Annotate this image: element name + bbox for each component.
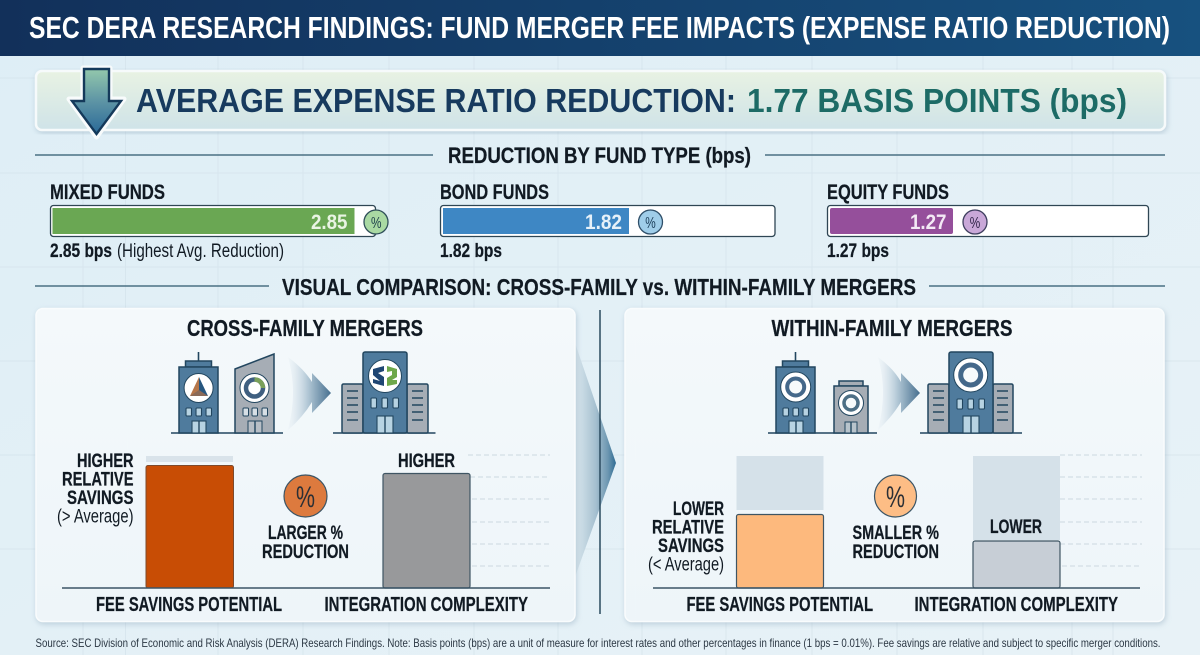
chart: integration complexity, higher — [383, 451, 550, 588]
axis labels: FEE SAVINGS POTENTIAL — [96, 593, 282, 616]
label: higher relative savings: RELATIVE — [62, 470, 134, 490]
label: higher relative savings: HIGHER — [77, 451, 134, 472]
chart: integration complexity, lower — [973, 455, 1142, 588]
chart: integration complexity, lower: LOWER — [990, 517, 1042, 538]
bar: equity funds 1.27 — [828, 206, 1148, 236]
icon: percent circle, larger: % — [296, 481, 315, 514]
bar: bond funds 1.82 — [440, 206, 775, 236]
label: smaller percent reduction: REDUCTION — [852, 542, 939, 563]
label: larger percent reduction: REDUCTION — [262, 542, 349, 563]
heading: CROSS-FAMILY MERGERS — [187, 315, 423, 341]
label: equity funds: EQUITY FUNDS — [827, 180, 949, 204]
icon: merge arrow — [288, 357, 331, 430]
panel: bond funds — [440, 180, 775, 262]
axis baseline — [653, 587, 1140, 589]
chart: fee savings potential, lower — [736, 456, 824, 588]
headline label: AVERAGE EXPENSE RATIO REDUCTION: — [136, 83, 736, 120]
icon: percent circle, larger — [284, 475, 327, 517]
label: mixed funds: MIXED FUNDS — [50, 180, 165, 204]
axis labels — [96, 593, 528, 616]
bar: mixed funds 2.85 — [50, 206, 376, 236]
icon: merge arrow — [878, 357, 920, 430]
icon: percent badge — [963, 210, 987, 234]
panel: cross-family mergers — [36, 308, 575, 622]
icon: down arrow — [69, 68, 124, 137]
label: smaller percent reduction: SMALLER % — [852, 523, 939, 544]
value note: 1.27 bps — [827, 240, 889, 262]
label: lower relative savings: RELATIVE — [652, 518, 724, 538]
panel: within-family mergers — [625, 308, 1164, 622]
label: bond funds: BOND FUNDS — [440, 180, 549, 204]
label: lower relative savings: (< Average) — [648, 554, 724, 576]
axis labels: INTEGRATION COMPLEXITY — [914, 593, 1118, 616]
axis labels: INTEGRATION COMPLEXITY — [324, 593, 528, 616]
icon: percent badge — [638, 210, 662, 234]
panel: mixed funds — [50, 180, 388, 262]
icon: merged building — [920, 352, 1022, 433]
icon: percent circle, smaller — [874, 475, 916, 517]
label: higher relative savings: SAVINGS — [67, 488, 134, 509]
label: lower relative savings — [648, 499, 724, 576]
section heading: reduction by fund type: REDUCTION BY FUND TYPE (bps) — [448, 143, 751, 168]
divider: central vertical line — [599, 310, 601, 614]
heading: WITHIN-FAMILY MERGERS — [772, 315, 1012, 341]
icon: percent badge: % — [371, 215, 382, 232]
bar: mixed funds 2.85: 2.85 — [311, 210, 348, 234]
note: highest average reduction: (Highest Avg. Reduction) — [117, 240, 284, 262]
chart: fee savings potential, higher — [146, 456, 234, 588]
axis baseline — [62, 587, 550, 589]
section heading: visual comparison: VISUAL COMPARISON: CROSS-FAMILY vs. WITHIN-FAMILY MERGERS — [282, 274, 916, 300]
icon: merged building — [333, 352, 436, 433]
icon: two separate fund family buildings — [171, 352, 283, 433]
headline value: 1.77 BASIS POINTS (bps) — [747, 83, 1127, 120]
value note: 1.82 bps — [440, 240, 502, 262]
icon: percent circle, smaller: % — [886, 481, 905, 514]
value note: 2.85 bps — [50, 240, 112, 262]
label: higher relative savings — [57, 451, 134, 528]
panel: equity funds — [827, 180, 1148, 262]
bar: bond funds 1.82: 1.82 — [585, 210, 622, 234]
axis labels: FEE SAVINGS POTENTIAL — [686, 593, 873, 616]
label: lower relative savings: LOWER — [673, 499, 724, 520]
icon: percent badge: % — [645, 215, 656, 232]
banner: average expense ratio reduction — [36, 68, 1165, 137]
icon: percent badge — [364, 210, 388, 234]
icon: two same-family buildings — [768, 352, 877, 433]
label: smaller percent reduction — [852, 523, 939, 563]
bar: equity funds 1.27: 1.27 — [910, 210, 947, 234]
title bar — [0, 0, 1200, 56]
axis labels — [686, 593, 1118, 616]
label: larger percent reduction: LARGER % — [268, 523, 343, 544]
chart: integration complexity, higher: HIGHER — [398, 451, 455, 472]
icon: percent badge: % — [970, 215, 980, 232]
label: larger percent reduction — [262, 523, 349, 563]
arrow: central chevron — [575, 343, 616, 577]
label: higher relative savings: (> Average) — [57, 506, 134, 528]
label: lower relative savings: SAVINGS — [658, 536, 724, 557]
